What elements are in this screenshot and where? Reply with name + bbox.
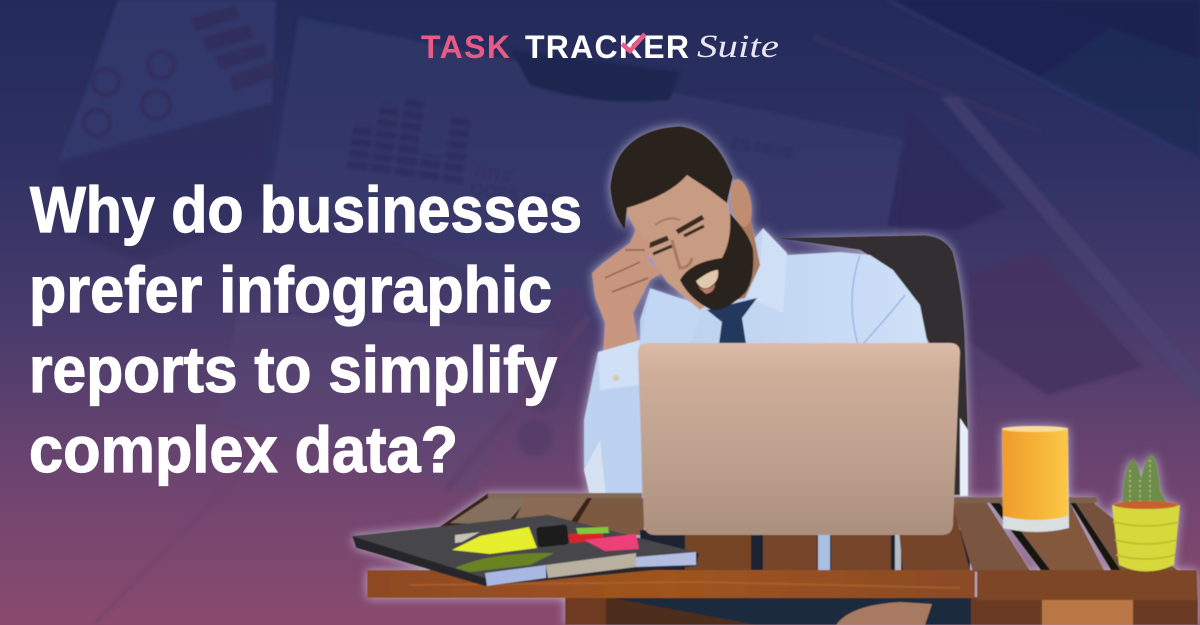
juice glass <box>1002 426 1069 532</box>
ear <box>727 178 755 228</box>
necktie <box>707 298 757 344</box>
faint report sheet: TITLE <box>471 163 514 186</box>
faint hand shadow <box>59 105 272 260</box>
hair <box>610 126 733 230</box>
illustration: man at desk <box>352 126 1198 625</box>
shirt shoulder seam <box>852 255 905 345</box>
eye brows <box>648 217 703 246</box>
beard <box>680 213 753 310</box>
closed eyes <box>653 226 704 254</box>
shirt cuff <box>598 340 640 390</box>
title: prefer infographic <box>29 253 552 326</box>
cactus in yellow pot <box>1112 455 1180 572</box>
faint report sheet: GOES HERE <box>469 179 572 214</box>
shirt collar <box>747 228 787 313</box>
faint chart sheet with circles <box>59 0 278 160</box>
finger lines <box>605 250 648 292</box>
logo: Task Tracker Suite: Suite <box>697 29 779 65</box>
nose <box>672 240 692 268</box>
faint report sheet: ES HERE <box>729 135 797 162</box>
faint tablet <box>217 313 560 490</box>
title: reports to simplify <box>29 333 557 406</box>
table front edge <box>367 570 975 598</box>
faint laptop keyboard at top right <box>897 0 1150 77</box>
icon: logo check mark <box>622 34 645 51</box>
shirt sleeve <box>584 340 642 496</box>
title: Why do businesses <box>30 173 582 246</box>
clipboard with highlighters <box>352 515 699 586</box>
faint report sheet <box>272 17 906 370</box>
table legs and under-table <box>565 597 1198 625</box>
faint dark shapes at right <box>887 115 1007 230</box>
icon: yellow highlighter <box>452 527 537 554</box>
hand under table <box>836 602 932 625</box>
office chair <box>775 235 968 495</box>
shirt torso <box>640 228 928 345</box>
faint laptop keyboard behind logo <box>511 50 680 102</box>
logo: Task Tracker Suite: TRACKER <box>525 29 689 65</box>
table top slats <box>420 493 1180 572</box>
title <box>29 173 582 486</box>
laptop <box>638 343 960 535</box>
title: complex data? <box>29 413 458 486</box>
white shirt tail right <box>960 418 968 496</box>
hand <box>592 227 662 357</box>
mouth <box>696 270 718 288</box>
logo: Task Tracker Suite: TASK <box>421 29 510 65</box>
faint pencil <box>813 37 1040 132</box>
faint lettered circles <box>517 287 587 456</box>
logo: Task Tracker Suite <box>421 29 779 65</box>
face <box>625 175 735 310</box>
neck <box>715 215 760 305</box>
